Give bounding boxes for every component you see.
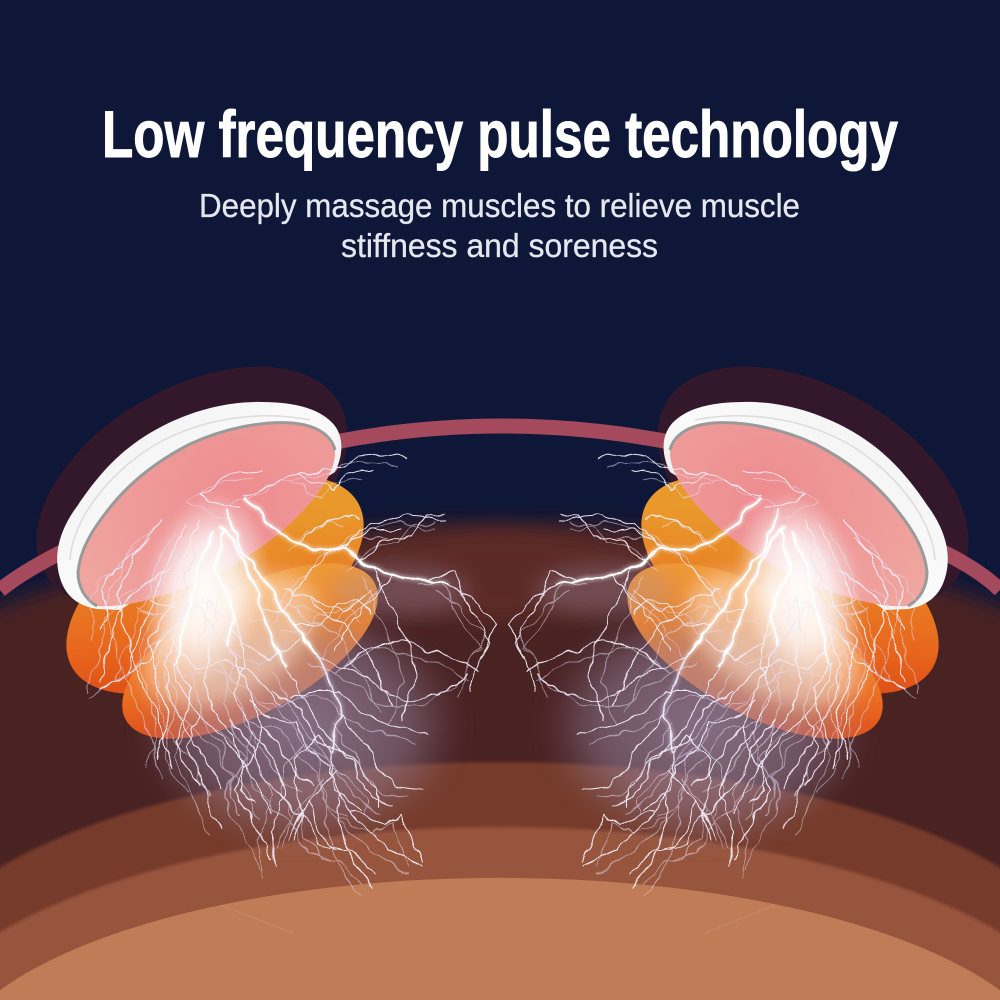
- neck cable: left end: [0, 550, 66, 590]
- neck cable: top arc: [330, 426, 675, 443]
- body: dark shoulder mound: [0, 525, 1000, 1000]
- right halo behind pad: [616, 316, 1000, 660]
- lightning: main bolts: [176, 497, 448, 752]
- body: reddish upper shoulder tint: [330, 530, 670, 620]
- body: muscle layer: [0, 762, 1000, 1000]
- subtitle: [199, 187, 800, 264]
- left halo behind pad: [0, 316, 389, 660]
- white hot core: [124, 479, 286, 701]
- side haze toward centre: [330, 564, 470, 616]
- subtitle line 2: stiffness and soreness: [341, 227, 658, 264]
- body: skin layer: [0, 878, 1000, 1000]
- pad silver ring: [78, 423, 335, 606]
- rear orange heat zone: [31, 431, 399, 739]
- body: middle layer: [0, 827, 1000, 1000]
- subtitle line 1: Deeply massage muscles to relieve muscle: [199, 187, 800, 224]
- front orange heat zone: [96, 528, 404, 774]
- lavender haze around lightning: [135, 600, 465, 850]
- faint skin lines: [220, 905, 775, 933]
- neck cable: right end: [939, 550, 1000, 590]
- pad rim highlight: [70, 416, 310, 560]
- left massager unit: [31, 402, 497, 896]
- lightning: fine branches, layer 2: [88, 463, 485, 896]
- pad face: [78, 423, 335, 606]
- peach glow over orange: [120, 545, 340, 735]
- pad white rim: [57, 402, 341, 610]
- lightning: fine branches, layer 1: [100, 455, 497, 888]
- right massager unit: [508, 402, 974, 896]
